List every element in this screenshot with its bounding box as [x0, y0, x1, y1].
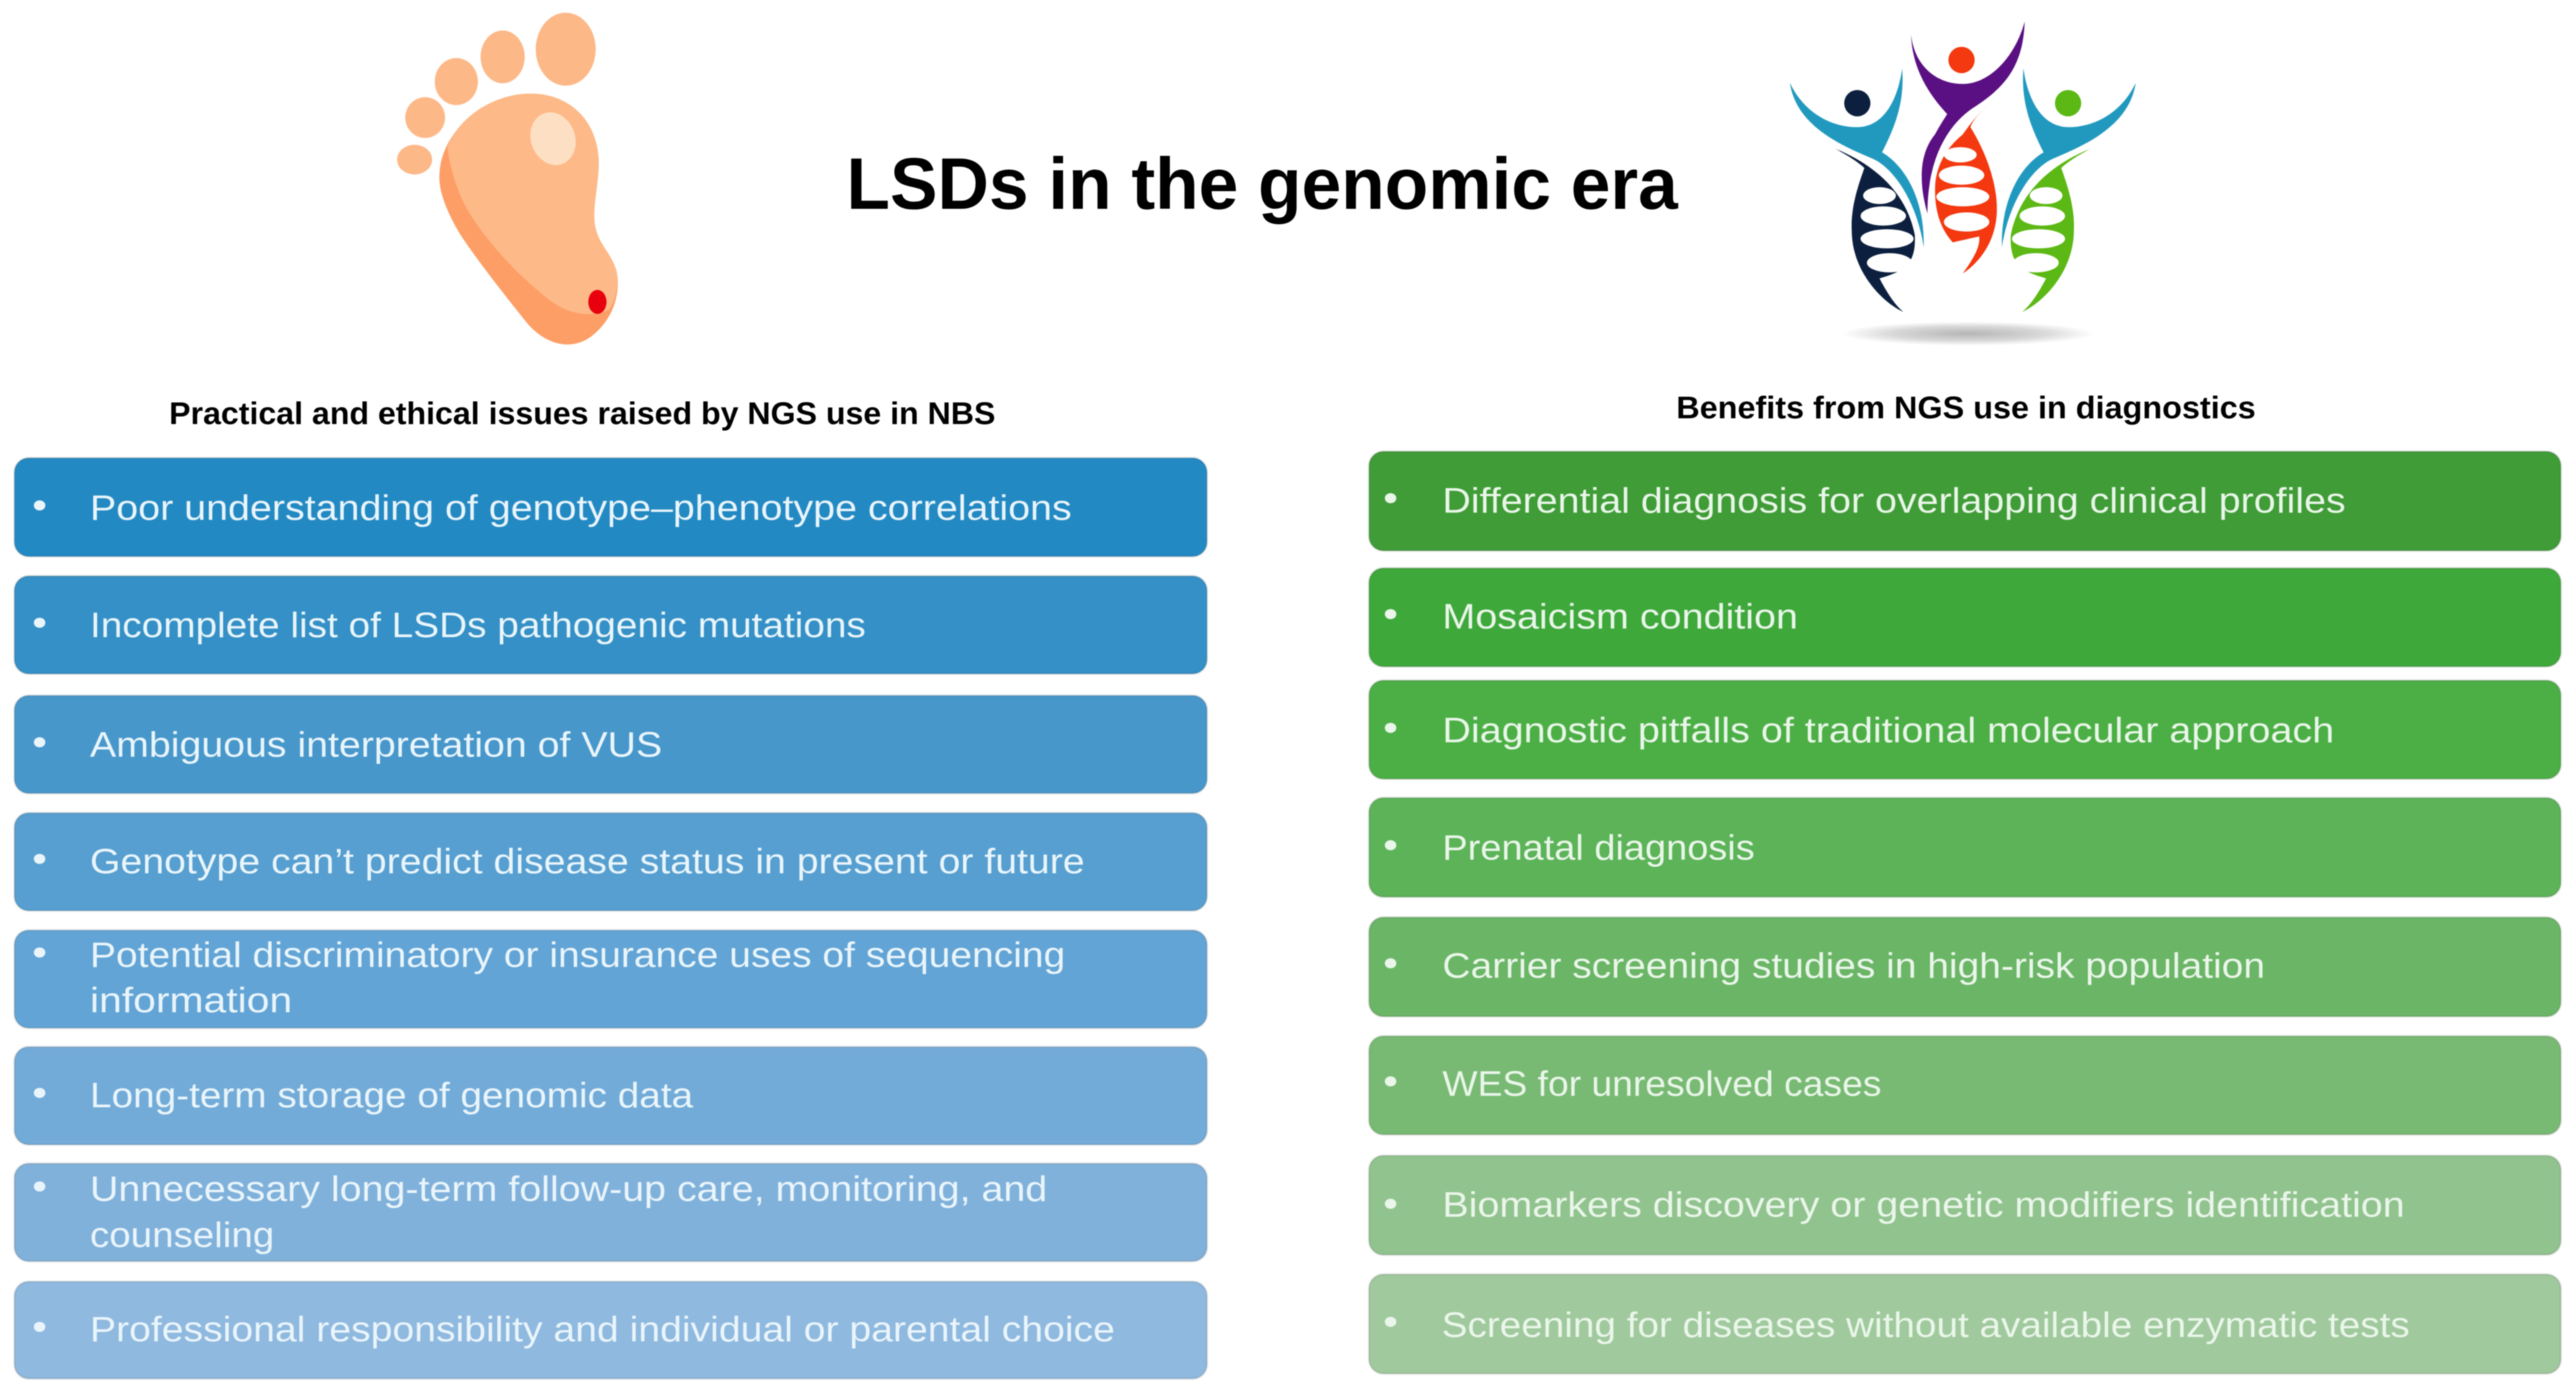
benefit 7	[1369, 1156, 2561, 1255]
benefit 3: Diagnostic pitfalls of traditional molecular approach	[1442, 711, 2334, 750]
issue 1: Poor understanding of genotype–phenotype correlations	[90, 489, 1072, 528]
issue 7	[14, 1163, 1207, 1261]
benefit 8	[1369, 1274, 2561, 1374]
heading: left column: Practical and ethical issues raised by NGS use in NBS	[169, 396, 995, 431]
benefit 5: Carrier screening studies in high-risk population	[1442, 947, 2265, 986]
issue 8: Professional responsibility and individual or parental choice	[90, 1310, 1115, 1349]
panel: benefits in diagnostics	[1369, 390, 2561, 1374]
benefit 2	[1369, 568, 2561, 667]
benefit 1: Differential diagnosis for overlapping clinical profiles	[1442, 482, 2346, 521]
benefit 2: Mosaicism condition	[1442, 598, 1798, 636]
benefit 7: Biomarkers discovery or genetic modifiers identification	[1442, 1186, 2405, 1225]
issue 2: Incomplete list of LSDs pathogenic mutations	[90, 606, 866, 645]
issue 4: Genotype can’t predict disease status in present or future	[90, 842, 1085, 881]
heading: right column: Benefits from NGS use in diagnostics	[1676, 390, 2256, 425]
benefit 6	[1369, 1036, 2561, 1135]
benefit 6: WES for unresolved cases	[1442, 1065, 1881, 1104]
issue 5: Potential discriminatory or insurance uses of sequencing	[90, 936, 1065, 975]
issue 3	[14, 695, 1207, 793]
panel: practical and ethical issues	[14, 396, 1207, 1379]
benefit 4: Prenatal diagnosis	[1442, 829, 1755, 868]
benefit 5	[1369, 917, 2561, 1017]
title: LSDs in the genomic era	[846, 144, 1678, 225]
benefit 8: Screening for diseases without available enzymatic tests	[1442, 1306, 2410, 1345]
issue 6	[14, 1047, 1207, 1145]
benefit 4	[1369, 798, 2561, 897]
icon: baby foot with heel-prick dot	[397, 13, 618, 344]
issue 6: Long-term storage of genomic data	[90, 1076, 694, 1115]
issue 5	[14, 930, 1207, 1028]
issue 8	[14, 1282, 1207, 1379]
issue 7: Unnecessary long-term follow-up care, monitoring, and	[90, 1170, 1047, 1209]
issue 4	[14, 813, 1207, 911]
icon: three DNA people	[1790, 22, 2136, 346]
benefit 1	[1369, 451, 2561, 551]
issue 2	[14, 576, 1207, 674]
issue 7: counseling	[90, 1216, 274, 1255]
issue 1	[14, 458, 1207, 557]
benefit 3	[1369, 680, 2561, 779]
issue 3: Ambiguous interpretation of VUS	[90, 726, 662, 765]
issue 5: information	[90, 981, 292, 1020]
